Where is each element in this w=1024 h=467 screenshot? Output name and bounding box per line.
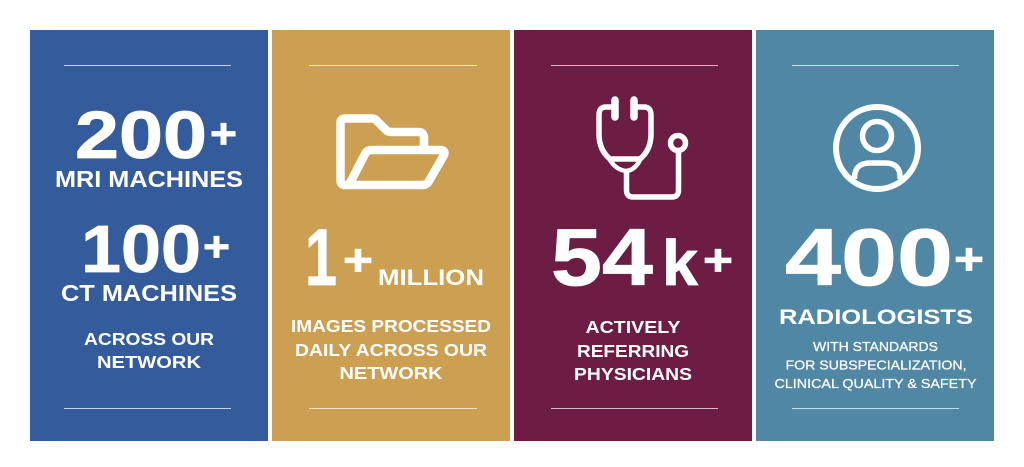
panel: images processed <box>272 30 510 441</box>
text: images processed: IMAGES PROCESSED <box>291 316 491 336</box>
text: images processed: NETWORK <box>340 363 443 383</box>
text: actively referring physicians: PHYSICIANS <box>574 364 692 384</box>
text: actively referring physicians: REFERRING <box>577 341 689 361</box>
stat: 1+: 1 <box>305 213 337 303</box>
panel: radiologists <box>756 30 994 441</box>
stat: 400+: + <box>954 235 984 284</box>
icon: open folder <box>340 118 444 185</box>
label: MRI machines: MRI MACHINES <box>55 166 243 192</box>
text: across our network: NETWORK <box>97 352 201 372</box>
panel: referring physicians <box>514 30 752 441</box>
text: across our network <box>84 329 214 372</box>
text: standards <box>774 339 977 391</box>
label: CT machines: CT MACHINES <box>61 280 237 306</box>
stat: 1+ <box>305 213 373 303</box>
text: actively referring physicians: ACTIVELY <box>586 317 681 337</box>
stat: 54k+: k <box>662 227 698 299</box>
panel: MRI and CT machines <box>30 30 268 441</box>
stat: 54k+: + <box>703 236 733 285</box>
text: images processed: DAILY ACROSS OUR <box>295 340 487 360</box>
text: images processed <box>291 316 491 383</box>
icon: person in circle <box>836 107 918 189</box>
stat: 100+: 100 <box>81 212 201 287</box>
text: standards: WITH STANDARDS <box>813 339 938 354</box>
stat: 400+ <box>785 213 984 303</box>
stat: 200+: 200 <box>75 98 207 173</box>
stat: 100+: + <box>203 223 230 270</box>
text: across our network: ACROSS OUR <box>84 329 214 349</box>
text: actively referring physicians <box>574 317 692 384</box>
stat: 54k+: 54 <box>551 213 653 303</box>
label: radiologists: RADIOLOGISTS <box>779 305 973 329</box>
icon: stethoscope <box>599 100 686 197</box>
stat: 400+: 400 <box>785 213 953 303</box>
stat: 200+ <box>75 98 237 173</box>
text: standards: CLINICAL QUALITY & SAFETY <box>774 376 977 391</box>
stat: 54k+ <box>551 213 733 303</box>
stat: 1+: + <box>343 236 373 285</box>
label: million: MILLION <box>378 265 484 290</box>
stat: 200+: + <box>210 110 237 157</box>
text: standards: FOR SUBSPECIALIZATION, <box>786 358 966 372</box>
